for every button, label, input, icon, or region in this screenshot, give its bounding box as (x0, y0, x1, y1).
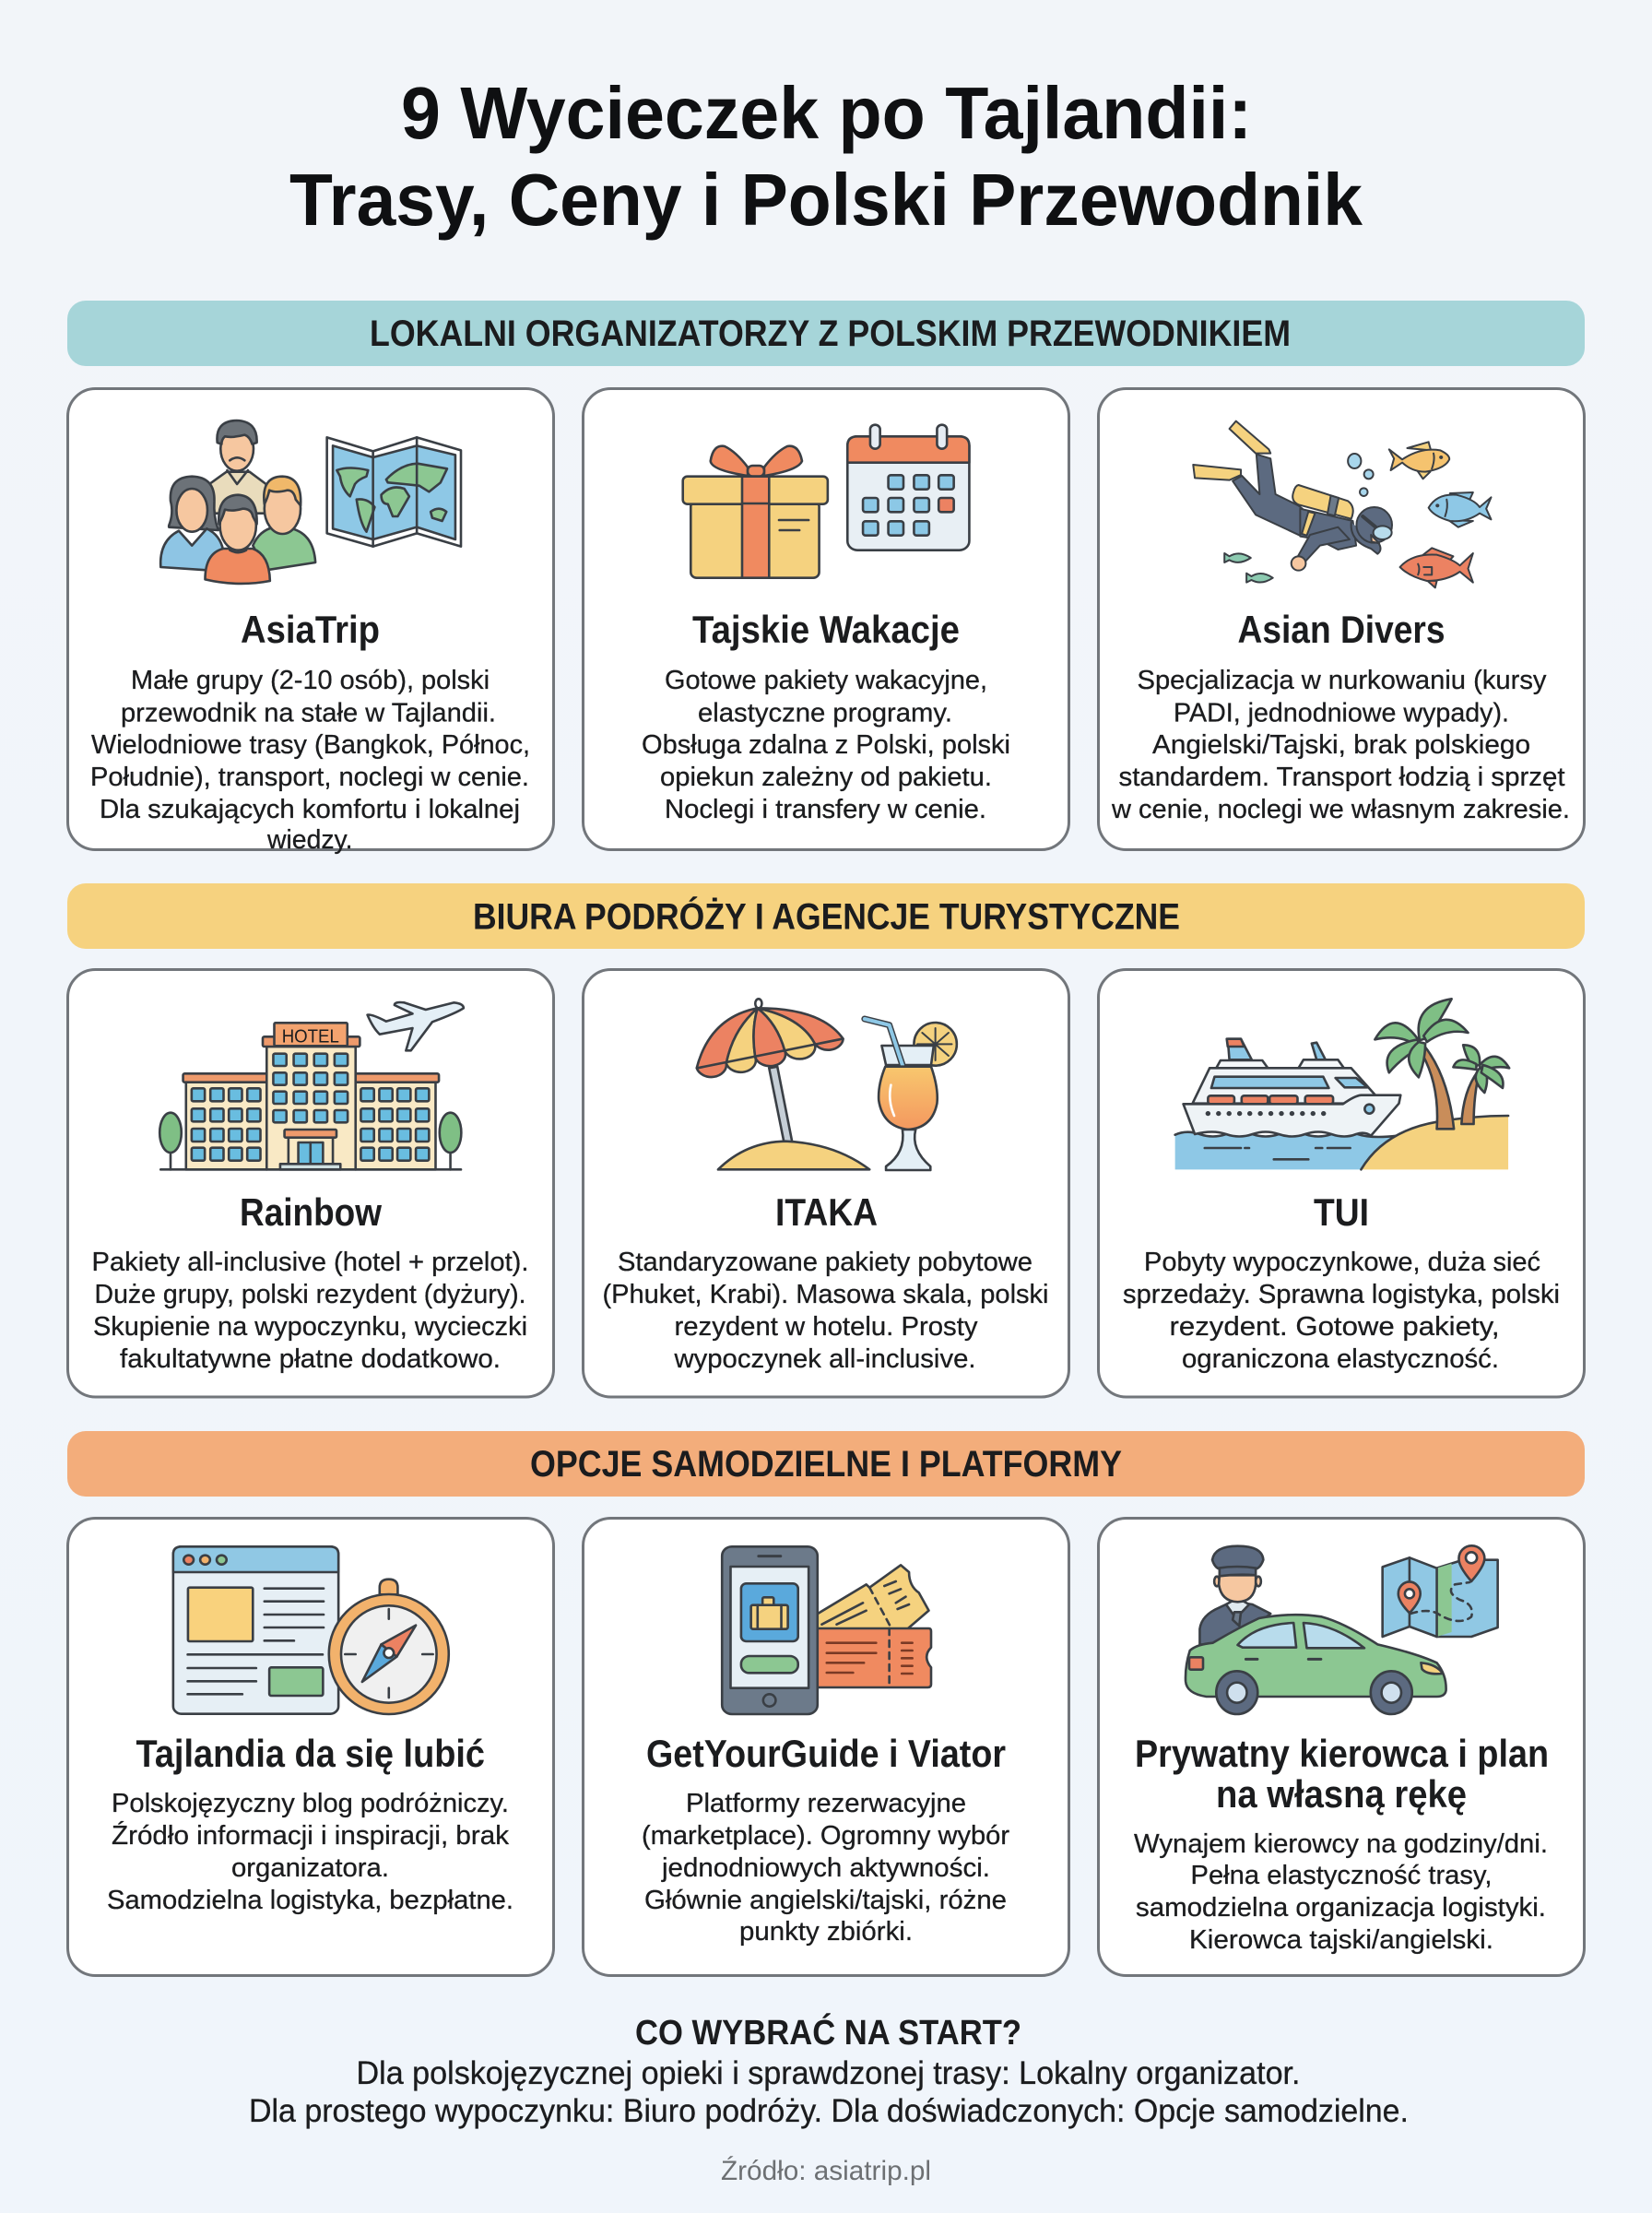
icon: web page and compass (173, 1546, 449, 1714)
section banner: biura podróży (67, 883, 1585, 949)
description: TUI: Pobyty wypoczynkowe, duża sieć (1144, 1248, 1540, 1277)
description: Tajskie Wakacje: opiekun zależny od pakietu. (660, 763, 992, 792)
panel: Tajlandia da się lubić (68, 1518, 553, 1975)
description: Tajskie Wakacje: Obsługa zdalna z Polski, polski (642, 730, 1010, 760)
description: Prywatny kierowca: Pełna elastyczność trasy, (1191, 1861, 1492, 1890)
description: AsiaTrip (90, 666, 530, 855)
section banner: opcje samodzielne: OPCJE SAMODZIELNE I PLATFORMY (530, 1444, 1122, 1485)
description: GetYourGuide i Viator: Platformy rezerwacyjne (686, 1789, 966, 1818)
description: Prywatny kierowca: samodzielna organizacja logistyki. (1136, 1893, 1546, 1923)
description: AsiaTrip: przewodnik na stałe w Tajlandii. (121, 699, 496, 728)
heading: Asian Divers: Asian Divers (1237, 608, 1446, 651)
description: GetYourGuide i Viator (642, 1789, 1009, 1947)
description: Asian Divers: Angielski/Tajski, brak polskiego (1152, 730, 1530, 760)
description: Tajlandia da się lubić: Samodzielna logistyka, bezpłatne. (107, 1886, 513, 1915)
description: Rainbow: Duże grupy, polski rezydent (dyżury). (94, 1280, 525, 1309)
description: ITAKA: wypoczynek all-inclusive. (673, 1344, 975, 1374)
summary: co wybrać na start: Dla prostego wypoczynku: Biuro podróży. Dla doświadczonych: Opcje samodzielne. (249, 2093, 1409, 2129)
heading: AsiaTrip: AsiaTrip (241, 608, 380, 651)
source note: Źródło: asiatrip.pl (721, 2156, 931, 2186)
title (289, 72, 1363, 241)
section banner: lokalni organizatorzy: LOKALNI ORGANIZATORZY Z POLSKIM PRZEWODNIKIEM (370, 314, 1291, 354)
summary: co wybrać na start (249, 2012, 1409, 2129)
section banner: lokalni organizatorzy (67, 301, 1585, 366)
panel: Prywatny kierowca (1099, 1518, 1584, 1975)
description: ITAKA (603, 1248, 1049, 1374)
description: TUI (1123, 1248, 1560, 1374)
summary: co wybrać na start: CO WYBRAĆ NA START? (635, 2012, 1021, 2053)
panel: AsiaTrip (68, 389, 553, 855)
section banner: opcje samodzielne (67, 1431, 1585, 1497)
description: GetYourGuide i Viator: punkty zbiórki. (739, 1917, 913, 1947)
description: GetYourGuide i Viator: (marketplace). Ogromny wybór (642, 1821, 1009, 1851)
description: Tajskie Wakacje: Gotowe pakiety wakacyjne, (665, 666, 987, 695)
description: Tajlandia da się lubić: organizatora. (231, 1853, 389, 1883)
title: 9 Wycieczek po Tajlandii: (401, 72, 1252, 154)
description: Prywatny kierowca: Wynajem kierowcy na godziny/dni. (1134, 1829, 1548, 1859)
panel: Rainbow (68, 970, 553, 1397)
description: ITAKA: rezydent w hotelu. Prosty (675, 1312, 978, 1342)
description: Asian Divers: Specjalizacja w nurkowaniu (kursy (1138, 666, 1547, 695)
heading: Prywatny kierowca: na własną rękę (1216, 1772, 1467, 1816)
description: Prywatny kierowca (1134, 1829, 1548, 1955)
heading: ITAKA: ITAKA (775, 1190, 878, 1234)
description: Tajskie Wakacje: elastyczne programy. (698, 699, 952, 728)
description: AsiaTrip: Wielodniowe trasy (Bangkok, Północ, (91, 730, 530, 760)
description: TUI: sprzedaży. Sprawna logistyka, polski (1123, 1280, 1560, 1309)
description: Tajskie Wakacje: Noclegi i transfery w cenie. (665, 795, 986, 824)
icon: gift box and calendar (683, 425, 969, 578)
panel: Asian Divers (1099, 389, 1584, 850)
icon: hotel and airplane: HOTEL (282, 1025, 339, 1047)
section banner: biura podróży: BIURA PODRÓŻY I AGENCJE TURYSTYCZNE (473, 894, 1180, 937)
panel: Tajskie Wakacje (583, 389, 1069, 850)
icon: beach umbrella and cocktail (697, 999, 957, 1170)
heading: Rainbow: Rainbow (240, 1190, 382, 1234)
heading: Prywatny kierowca: Prywatny kierowca i plan (1135, 1732, 1549, 1775)
description: ITAKA: Standaryzowane pakiety pobytowe (618, 1248, 1032, 1277)
description: Rainbow (92, 1248, 529, 1374)
heading: GetYourGuide i Viator: GetYourGuide i Viator (646, 1732, 1006, 1775)
description: Asian Divers (1111, 666, 1570, 824)
description: ITAKA: (Phuket, Krabi). Masowa skala, polski (603, 1280, 1049, 1309)
description: TUI: ograniczona elastyczność. (1182, 1344, 1499, 1374)
icon: cruise ship and palm island (1175, 999, 1509, 1169)
icon: smartphone and tickets (722, 1546, 931, 1714)
description: GetYourGuide i Viator: jednodniowych aktywności. (661, 1853, 990, 1883)
description: Rainbow: Skupienie na wypoczynku, wycieczki (93, 1312, 527, 1342)
description: Asian Divers: PADI, jednodniowe wypady). (1174, 699, 1509, 728)
description: Rainbow: Pakiety all-inclusive (hotel + przelot). (92, 1248, 529, 1277)
icon: group of people and world map (160, 420, 461, 584)
title: Trasy, Ceny i Polski Przewodnik (289, 159, 1363, 241)
panel: ITAKA (583, 970, 1069, 1397)
description: Asian Divers: standardem. Transport łodzią i sprzęt (1119, 763, 1565, 792)
icon: hotel and airplane (159, 1002, 464, 1169)
description: AsiaTrip: Małe grupy (2-10 osób), polski (131, 666, 490, 695)
description: AsiaTrip: Dla szukających komfortu i lokalnej (100, 795, 520, 824)
description: AsiaTrip: Południe), transport, noclegi w cenie. (90, 763, 529, 792)
description: Tajskie Wakacje (642, 666, 1010, 824)
summary: co wybrać na start: Dla polskojęzycznej opieki i sprawdzonej trasy: Lokalny organizator. (356, 2055, 1300, 2091)
description: Tajlandia da się lubić (107, 1789, 513, 1915)
heading: Prywatny kierowca (1135, 1732, 1549, 1816)
description: Prywatny kierowca: Kierowca tajski/angielski. (1189, 1925, 1493, 1955)
icon: driver, car and route map (1186, 1545, 1498, 1714)
description: Tajlandia da się lubić: Źródło informacji i inspiracji, brak (112, 1820, 510, 1851)
panel: GetYourGuide i Viator (583, 1518, 1069, 1975)
description: Asian Divers: w cenie, noclegi we własnym zakresie. (1111, 795, 1570, 824)
description: AsiaTrip: wiedzy. (266, 825, 352, 855)
description: TUI: rezydent. Gotowe pakiety, (1169, 1312, 1499, 1342)
heading: Tajskie Wakacje: Tajskie Wakacje (692, 608, 960, 651)
heading: Tajlandia da się lubić: Tajlandia da się lubić (136, 1732, 485, 1775)
heading: TUI: TUI (1314, 1190, 1369, 1234)
panel: TUI (1099, 970, 1584, 1397)
description: Tajlandia da się lubić: Polskojęzyczny blog podróżniczy. (112, 1789, 509, 1818)
description: GetYourGuide i Viator: Głównie angielski/tajski, różne (644, 1886, 1007, 1915)
description: Rainbow: fakultatywne płatne dodatkowo. (120, 1344, 501, 1374)
icon: scuba diver and fish (1193, 421, 1491, 587)
